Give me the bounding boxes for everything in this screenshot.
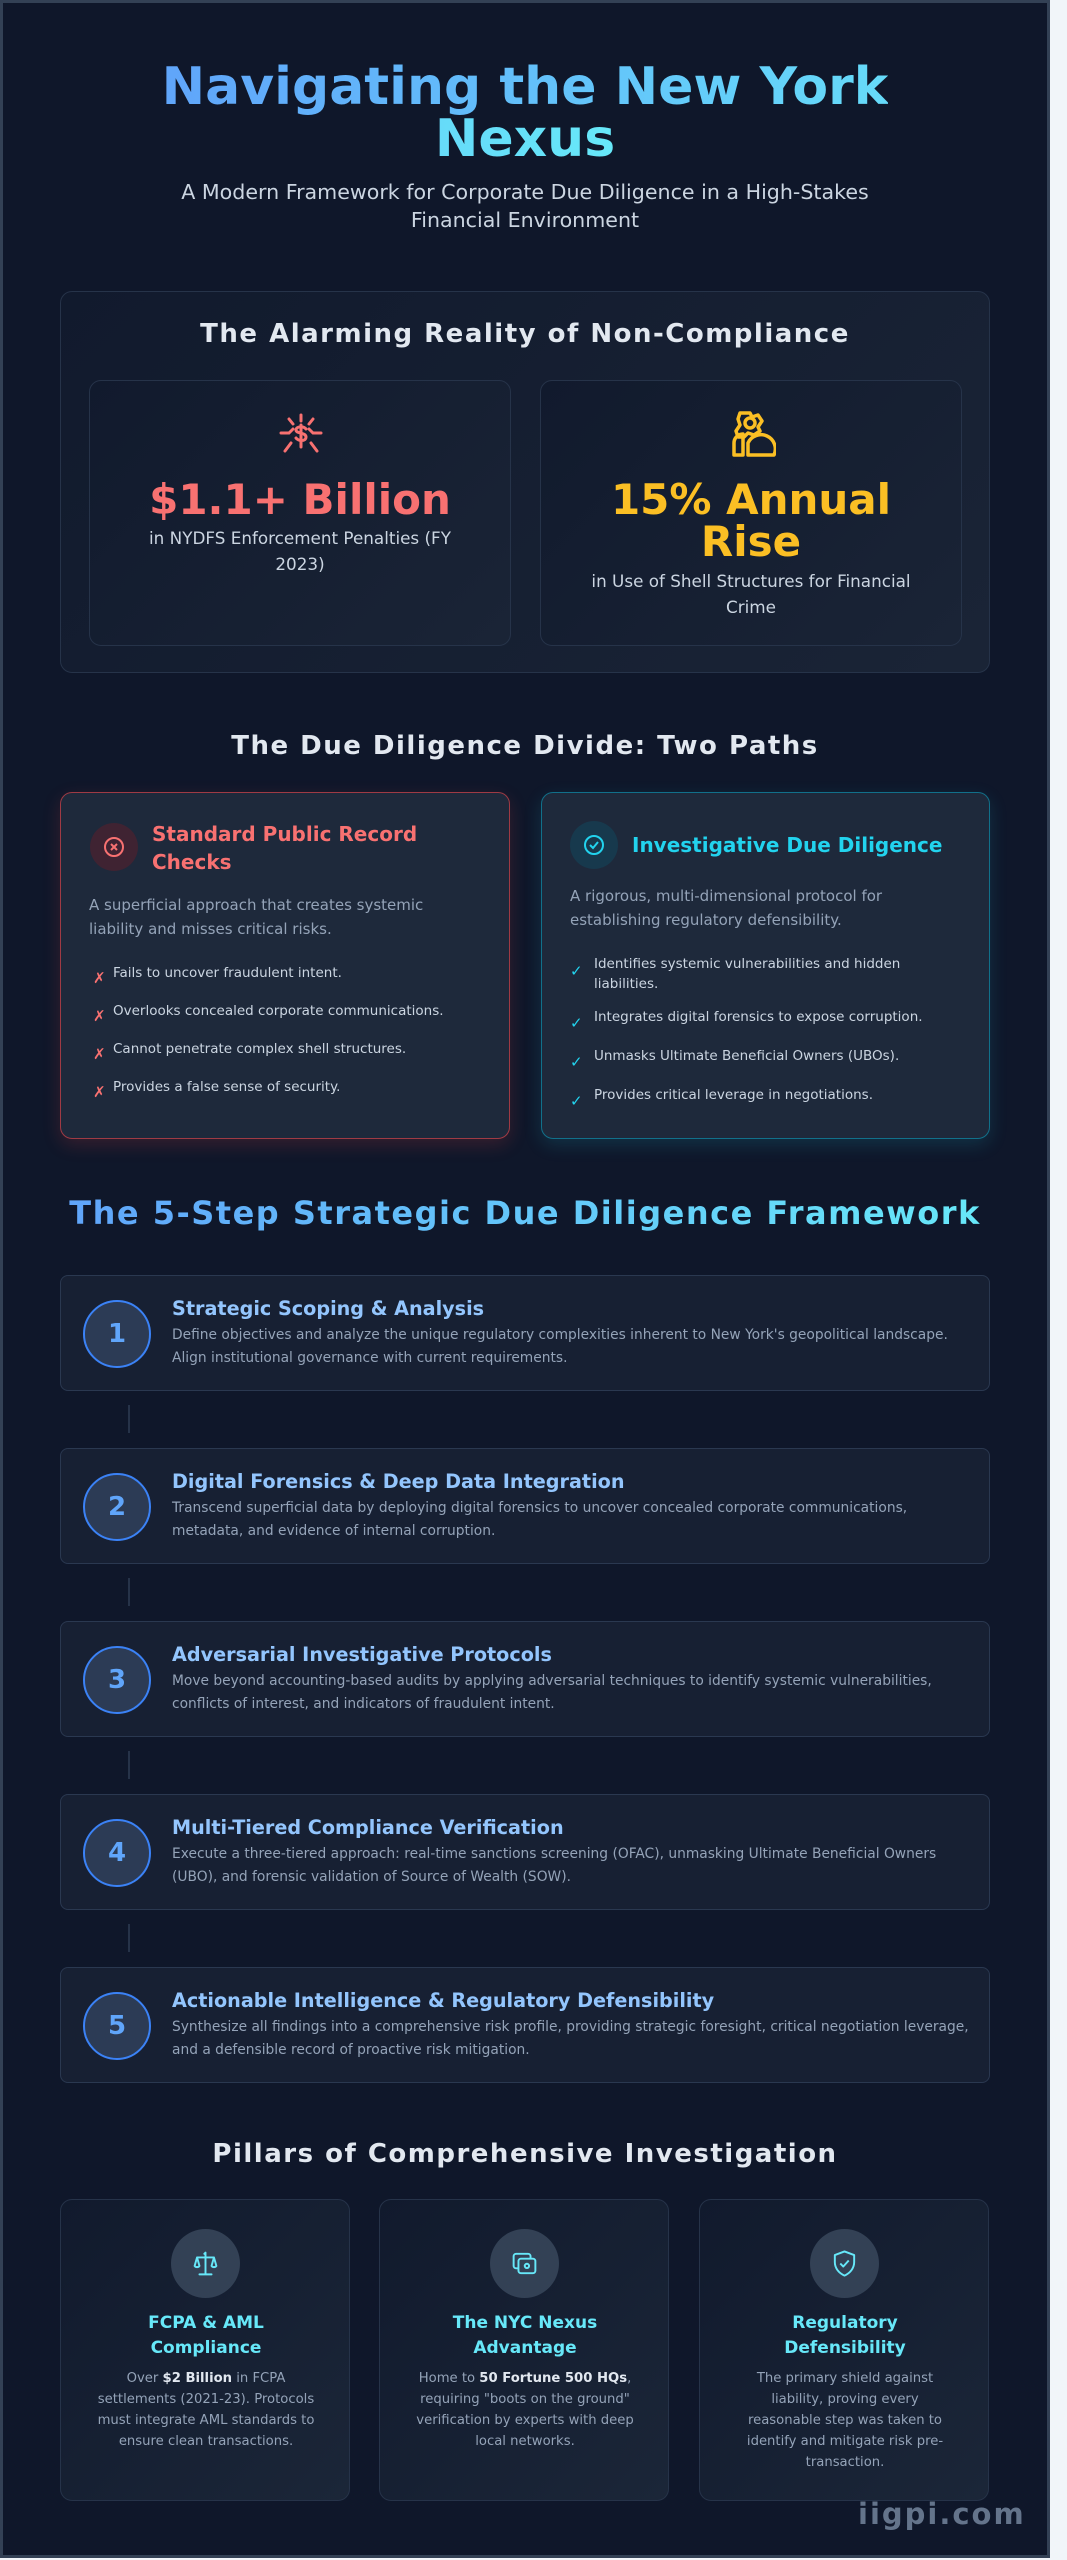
heading: due diligence divide: The Due Diligence Divide: Two Paths (231, 731, 819, 761)
panel: investigative due diligence (541, 792, 990, 1139)
step 5: 5 (108, 2011, 126, 2041)
pillar: regulatory defensibility: Regulatory (792, 2313, 898, 2333)
pillar: regulatory defensibility: Defensibility (784, 2338, 906, 2358)
stat value (611, 475, 891, 566)
icon: cards (490, 2229, 559, 2298)
pillar: FCPA & AML (60, 2199, 350, 2501)
list: strengths: ✓ (570, 1014, 583, 1032)
list: weaknesses: Provides a false sense of security. (113, 1079, 340, 1095)
step 2: 2 (108, 1492, 126, 1522)
list: strengths: ✓ (570, 962, 583, 980)
stat label: in Use of Shell Structures for Financial Crime (591, 571, 911, 617)
step 4: Execute a three-tiered approach: real-time sanctions screening (OFAC), unmasking Ultimate Beneficial Owners (UBO), and forensic validation of Source of Wealth (SOW). (172, 1846, 936, 1885)
title: Navigating the New York Nexus (162, 57, 888, 169)
panel: standard checks (60, 792, 510, 1139)
pillar: FCPA & AML: Compliance (151, 2338, 261, 2358)
list: weaknesses: ✗ (93, 1045, 106, 1063)
list: strengths: Unmasks Ultimate Beneficial Owners (UBOs). (594, 1048, 899, 1064)
list: strengths (570, 956, 923, 1110)
list: weaknesses (93, 965, 444, 1101)
icon: person gear (732, 411, 776, 457)
step 3 (60, 1621, 990, 1737)
pillar: NYC nexus: The NYC Nexus (453, 2313, 597, 2333)
pillar: NYC nexus: Home to 50 Fortune 500 HQs, requiring "boots on the ground" verification by experts with deep local networks. (416, 2371, 634, 2449)
step 3: 3 (108, 1665, 126, 1695)
icon: check circle (570, 821, 618, 869)
pillar: regulatory defensibility (699, 2199, 989, 2501)
step 4: 4 (108, 1838, 126, 1868)
card title: Investigative Due Diligence (632, 833, 942, 857)
step 4 (60, 1794, 990, 1910)
step 1: Define objectives and analyze the unique regulatory complexities inherent to New York's geopolitical landscape. Align institutional governance with current requirements. (172, 1327, 948, 1366)
step 2: Transcend superficial data by deploying digital forensics to uncover concealed corporate communications, metadata, and evidence of internal corruption. (172, 1500, 907, 1539)
list: strengths: ✓ (570, 1092, 583, 1110)
watermark: iigpi.com (858, 2497, 1026, 2531)
list: weaknesses: Overlooks concealed corporate communications. (113, 1003, 444, 1019)
stat value: 15% Annual (611, 475, 891, 524)
step 3: Adversarial Investigative Protocols (172, 1643, 552, 1666)
list: weaknesses: Cannot penetrate complex shell structures. (113, 1041, 406, 1057)
icon: x circle (90, 823, 138, 871)
stat card: penalties (89, 380, 511, 646)
step 2: Digital Forensics & Deep Data Integration (172, 1470, 624, 1493)
list: weaknesses: ✗ (93, 1007, 106, 1025)
step 5 (60, 1967, 990, 2083)
pillar: NYC nexus (379, 2199, 669, 2501)
list: weaknesses: ✗ (93, 969, 106, 987)
icon: bug dollar (280, 414, 322, 453)
stat value: Rise (701, 517, 801, 566)
pillar: FCPA & AML: Over $2 Billion in FCPA settlements (2021-23). Protocols must integrate AML standards to ensure clean transactions. (98, 2371, 314, 2449)
list: strengths: Integrates digital forensics to expose corruption. (594, 1009, 923, 1025)
step 4: Multi-Tiered Compliance Verification (172, 1816, 564, 1839)
list: weaknesses: ✗ (93, 1083, 106, 1101)
step 3: Move beyond accounting-based audits by applying adversarial techniques to identify systemic vulnerabilities, conflicts of interest, and indicators of fraudulent intent. (172, 1673, 932, 1712)
list: strengths: Identifies systemic vulnerabilities and hidden liabilities. (594, 956, 900, 992)
step 5: Actionable Intelligence & Regulatory Defensibility (172, 1989, 714, 2012)
subtitle: A Modern Framework for Corporate Due Diligence in a High-Stakes Financial Environment (181, 180, 869, 232)
icon: shield check (810, 2229, 879, 2298)
step 1: 1 (108, 1319, 126, 1349)
stat label: in NYDFS Enforcement Penalties (FY 2023) (149, 528, 451, 574)
card description: A superficial approach that creates systemic liability and misses critical risks. (89, 896, 423, 938)
stat value: $1.1+ Billion (149, 475, 451, 524)
icon: scales (171, 2229, 240, 2298)
pillar: FCPA & AML: FCPA & AML (148, 2313, 264, 2333)
heading: 5-step framework: The 5-Step Strategic Due Diligence Framework (69, 1194, 981, 1232)
step 1: Strategic Scoping & Analysis (172, 1297, 484, 1320)
list: weaknesses: Fails to uncover fraudulent intent. (113, 965, 342, 981)
card title: Standard Public Record Checks (152, 822, 417, 874)
heading: alarming reality: The Alarming Reality of Non-Compliance (200, 319, 850, 349)
pillar: regulatory defensibility: The primary shield against liability, proving every reasonable step was taken to identify and mitigate risk pre-transaction. (747, 2371, 943, 2470)
card description: A rigorous, multi-dimensional protocol for establishing regulatory defensibility. (570, 887, 882, 929)
step 1 (60, 1275, 990, 1391)
heading: pillars: Pillars of Comprehensive Investigation (212, 2139, 838, 2169)
stat card: shell structures (540, 380, 962, 646)
list: strengths: Provides critical leverage in negotiations. (594, 1087, 873, 1103)
pillar: NYC nexus: Advantage (473, 2338, 577, 2358)
step 2 (60, 1448, 990, 1564)
list: strengths: ✓ (570, 1053, 583, 1071)
step 5: Synthesize all findings into a comprehensive risk profile, providing strategic foresight, critical negotiation leverage, and a defensible record of proactive risk mitigation. (172, 2019, 969, 2058)
panel: alarming reality (60, 291, 990, 673)
